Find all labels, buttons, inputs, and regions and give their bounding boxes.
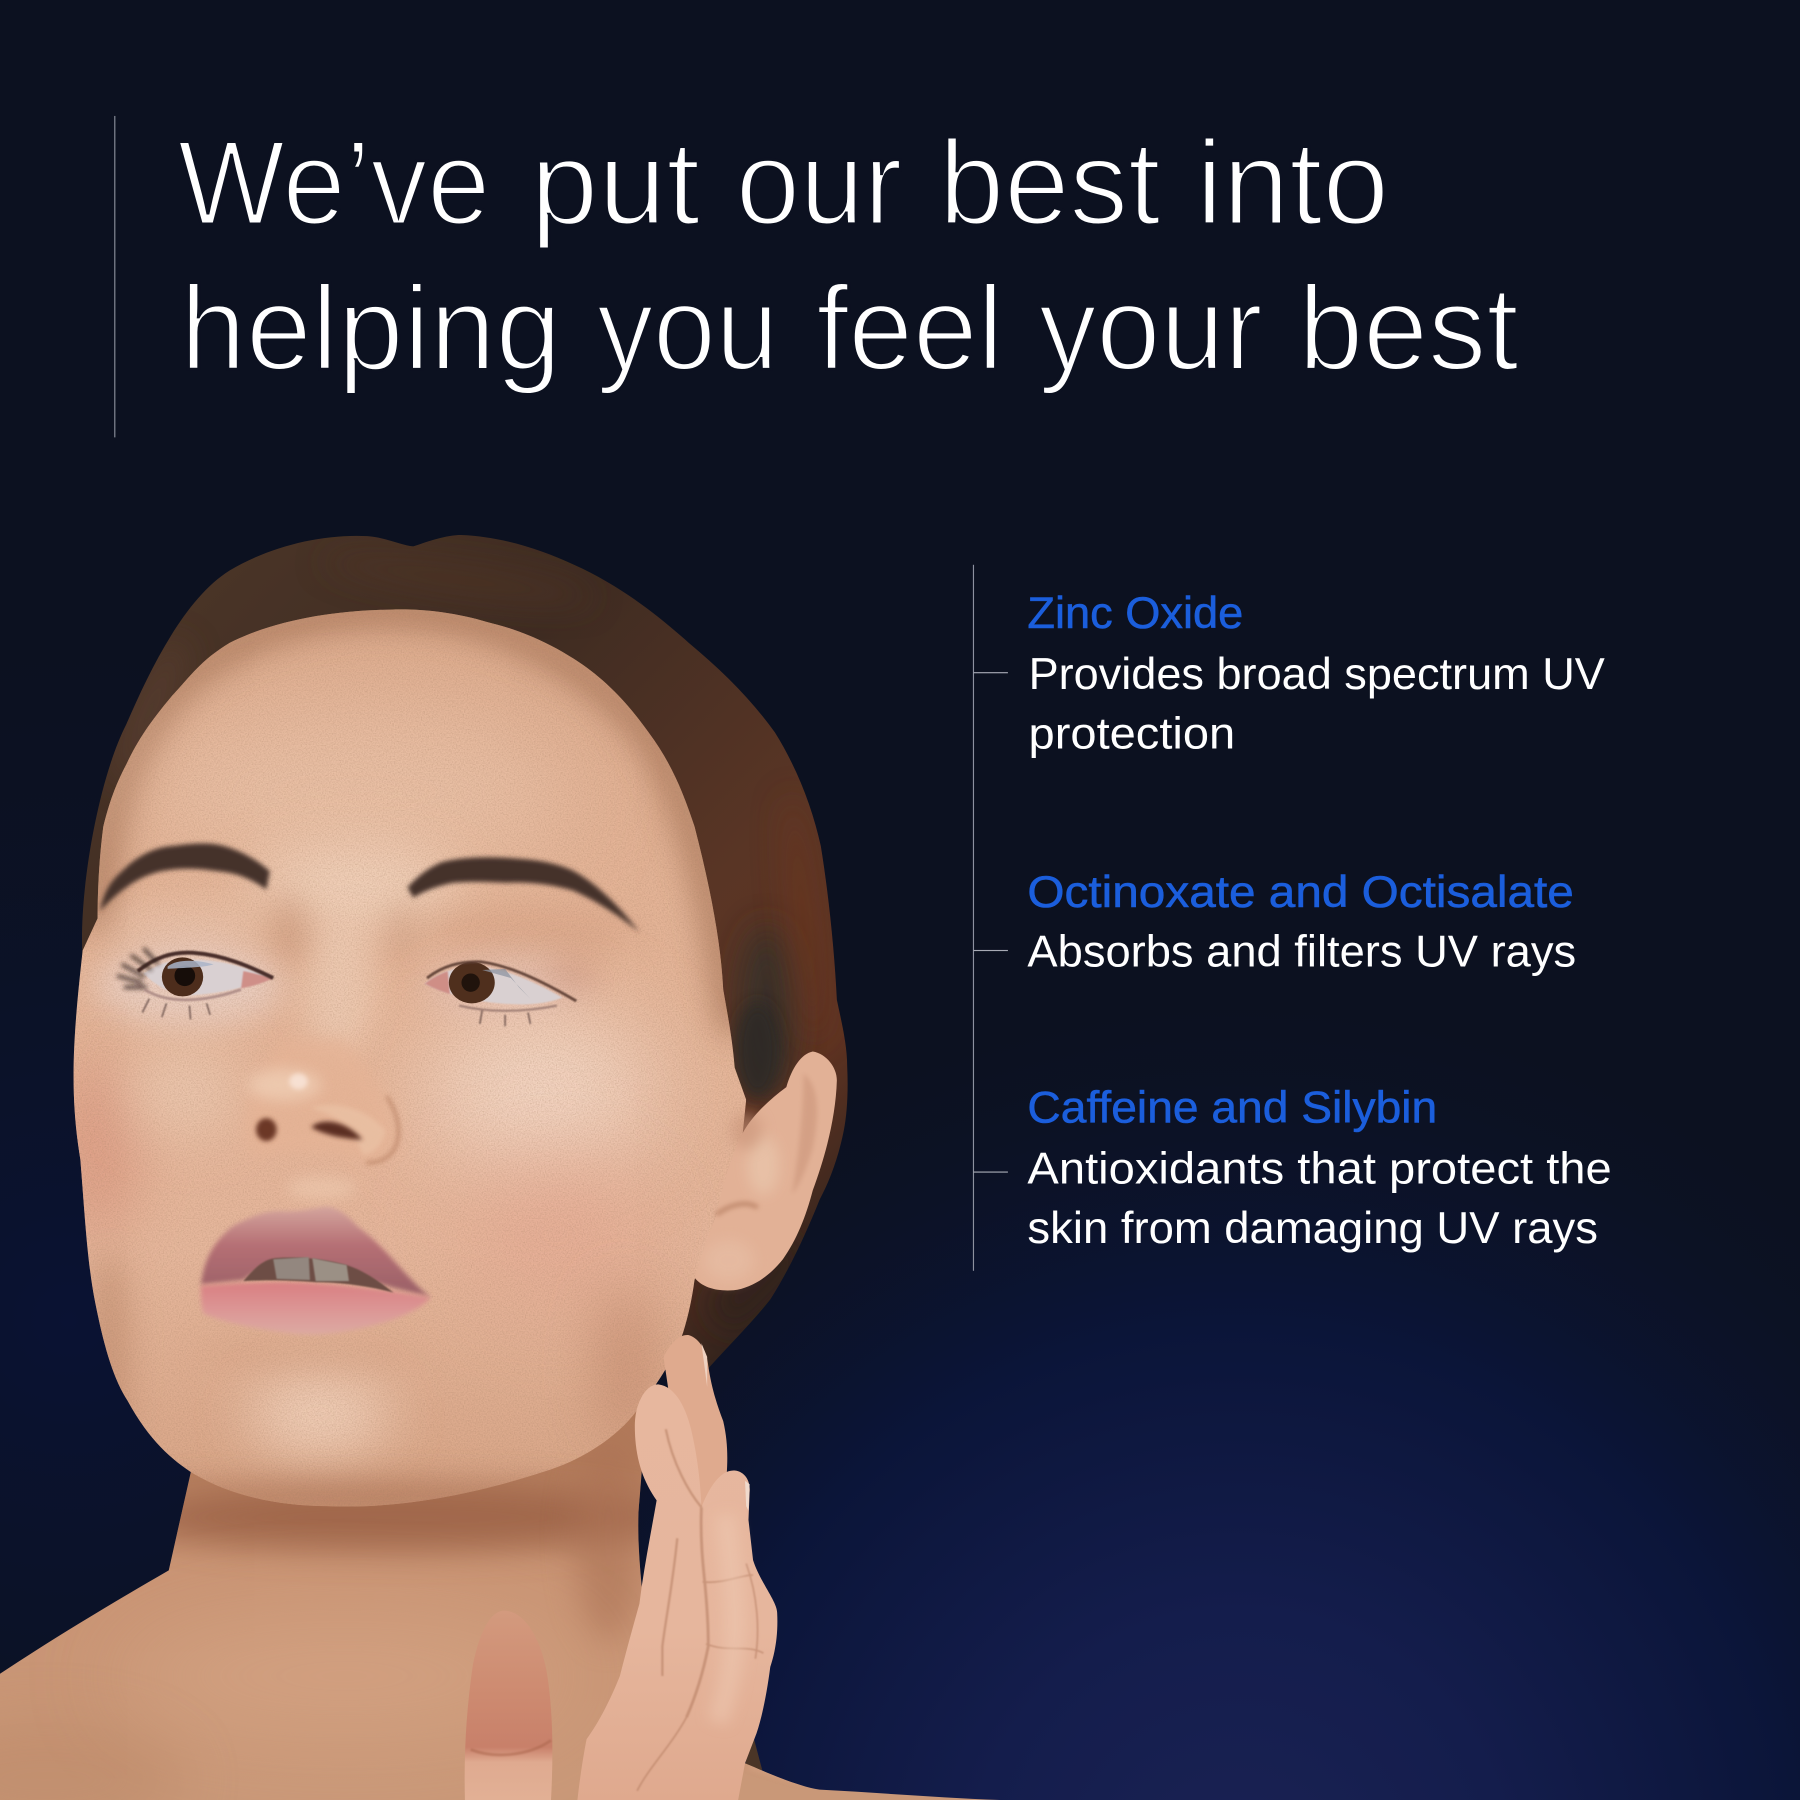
item: caffeine and silybin	[973, 1083, 1612, 1253]
item: caffeine and silybin: Caffeine and Silybin	[1027, 1083, 1437, 1133]
item: zinc oxide: protection	[1029, 708, 1235, 758]
lips	[201, 1207, 430, 1334]
hair sliver behind shoulder	[745, 1731, 762, 1770]
item: octinoxate and octisalate: Absorbs and filters UV rays	[1027, 927, 1576, 977]
palm and front fingers	[577, 1384, 777, 1800]
title: best	[939, 117, 1161, 250]
hair	[69, 528, 861, 1378]
item: zinc oxide	[973, 588, 1605, 758]
forehead glow	[138, 700, 574, 884]
finger creases	[637, 1429, 763, 1791]
nose	[243, 1039, 398, 1200]
title: put	[530, 117, 700, 250]
thumb	[465, 1611, 552, 1800]
finger: back	[664, 1335, 727, 1527]
ear	[695, 1052, 837, 1291]
eyebrows	[100, 843, 639, 932]
item: caffeine and silybin: skin from damaging UV rays	[1027, 1203, 1598, 1253]
cheeks	[425, 1010, 654, 1171]
bridge socket	[271, 895, 308, 969]
title: helping	[180, 263, 561, 396]
item: octinoxate and octisalate	[973, 867, 1576, 977]
face	[74, 609, 746, 1506]
skin texture	[74, 610, 746, 1506]
panel rule	[973, 565, 974, 1271]
item: zinc oxide: Provides broad spectrum UV	[1029, 649, 1605, 699]
brow shade	[428, 908, 611, 947]
item: zinc oxide: Zinc Oxide	[1027, 588, 1243, 638]
title	[178, 117, 1519, 396]
title: you	[597, 263, 778, 396]
right eye	[425, 962, 576, 1026]
hand	[465, 1335, 777, 1800]
title: into	[1196, 117, 1389, 250]
title rule	[114, 116, 115, 437]
title: feel	[816, 263, 1003, 396]
neck and shoulders	[0, 1401, 1000, 1800]
title: best	[1298, 263, 1519, 396]
ingredient panel	[973, 565, 1612, 1271]
title: your	[1039, 263, 1263, 396]
title: our	[736, 117, 902, 250]
item: caffeine and silybin: Antioxidants that protect the	[1027, 1144, 1612, 1194]
title: We’ve	[178, 117, 490, 250]
left eye	[117, 948, 273, 1019]
chin	[248, 1373, 390, 1456]
hairline shade	[98, 610, 735, 1033]
nail	[745, 1481, 750, 1511]
item: octinoxate and octisalate: Octinoxate and Octisalate	[1027, 867, 1574, 917]
eye shadow	[95, 941, 284, 1029]
portrait: woman touching neck	[0, 528, 1000, 1800]
